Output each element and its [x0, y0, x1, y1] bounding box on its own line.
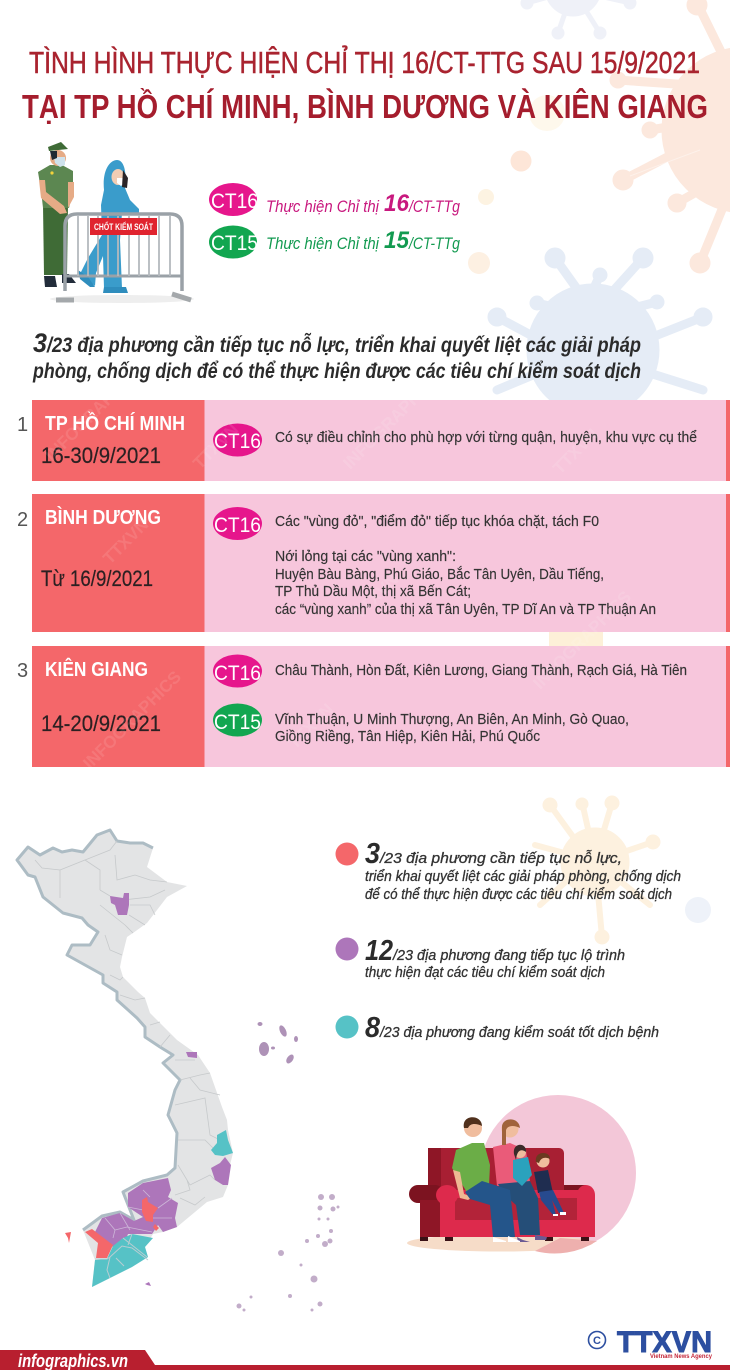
- daughter: [513, 1145, 532, 1186]
- father: [452, 1117, 520, 1242]
- legend: CT16: /CT-TTg: [408, 197, 460, 216]
- logo: TTXVN copyright: Vietnam News Agency: [650, 1353, 712, 1360]
- medic: [78, 160, 139, 293]
- provinces: purple: [95, 893, 231, 1286]
- panel: row 1 TP Ho Chi Minh: 1: [17, 414, 28, 436]
- province lines: [35, 841, 220, 1205]
- background virus decorations: [468, 0, 730, 944]
- legend: CT16: Thực hiện Chỉ thị: [266, 197, 380, 216]
- big orange virus: [610, 0, 730, 273]
- intro text: [32, 328, 641, 383]
- barrier: [56, 214, 191, 300]
- legend: CT16: 16: [384, 190, 410, 217]
- legend item: 3/23: [336, 838, 681, 903]
- legend item: 3/23: /23 địa phương cần tiếp tục nỗ lực,: [379, 850, 622, 867]
- checkpoint sign: [90, 218, 157, 235]
- legend: CT16: [209, 183, 460, 217]
- watermarks on rows: INFOGRAPHICS: [339, 367, 445, 473]
- legend item: 3/23: 3: [365, 838, 380, 870]
- provinces: red: [65, 1197, 159, 1258]
- title: [22, 45, 708, 125]
- legend item: 12/23: [336, 935, 625, 981]
- illustration: soldier and medic at checkpoint barrier: [38, 142, 194, 303]
- son: [534, 1153, 566, 1216]
- panel: row 3 Kien Giang: 3: [17, 660, 28, 682]
- legend: CT15: 15: [384, 227, 410, 254]
- legend item: 12/23: thực hiện đạt các tiêu chí kiểm soát dịch: [365, 965, 605, 981]
- small spots: [510, 150, 532, 172]
- panel: row 1 TP Ho Chi Minh: Có sự điều chỉnh cho phù hợp với từng quận, huyện, khu vực cụ thể: [275, 430, 697, 446]
- legend: CT15: [209, 226, 460, 258]
- panel: row 3 Kien Giang: CT16: [214, 662, 261, 685]
- panel: row 2 Binh Duong: [17, 494, 730, 632]
- panel: row 3 Kien Giang: [17, 646, 730, 767]
- panel: row 2 Binh Duong: Nới lỏng tại các "vùng xanh":: [275, 549, 456, 565]
- watermarks on rows: TTXVN: [99, 515, 152, 568]
- footer bar with website: [0, 1350, 730, 1370]
- sofa: [409, 1148, 595, 1241]
- panel: row 3 Kien Giang: 14-20/9/2021: [41, 711, 161, 736]
- map of Vietnam: [17, 830, 340, 1312]
- watermarks on rows: INFOGRAPHICS: [79, 667, 185, 773]
- panel: row 3 Kien Giang: CT15: [214, 711, 261, 734]
- purple province lines: [105, 1190, 172, 1238]
- panel: row 2 Binh Duong: 2: [17, 509, 28, 531]
- logo: TTXVN copyright: TTXVN: [617, 1326, 712, 1359]
- panel: row 2 Binh Duong: Từ 16/9/2021: [41, 566, 153, 591]
- panel: row 2 Binh Duong: Các "vùng đỏ", "điểm đỏ" tiếp tục khóa chặt, tách F0: [275, 514, 599, 530]
- provinces: teal: [92, 1130, 233, 1287]
- soldier: [38, 142, 76, 287]
- watermarks on rows: INFOGRAPHICS: [529, 587, 635, 693]
- legend item: 8/23: 8: [365, 1012, 381, 1044]
- panel: row 2 Binh Duong: CT16: [214, 514, 261, 537]
- legend: CT15: /CT-TTg: [408, 234, 460, 253]
- islands: Truong Sa: [236, 1194, 340, 1312]
- checkpoint sign: CHỐT KIỂM SOÁT: [94, 221, 153, 233]
- intro text: 3: [33, 328, 47, 358]
- legend item: 8/23: [336, 1012, 659, 1044]
- islands: Hoang Sa: [258, 1022, 298, 1065]
- panel: row 2 Binh Duong: TP Thủ Dầu Một, thị xã Bến Cát;: [275, 584, 471, 600]
- watermarks on rows: TTXVN: [349, 570, 402, 623]
- watermarks on rows: INFOGRAPHICS: [41, 359, 147, 465]
- panel: row 1 TP Ho Chi Minh: CT16: [214, 430, 261, 453]
- legend item: 12/23: 12: [365, 935, 393, 967]
- panel: row 1 TP Ho Chi Minh: TP HỒ CHÍ MINH: [45, 411, 185, 435]
- illustration: family on sofa: [407, 1095, 636, 1254]
- watermarks on rows: TTXVN: [549, 425, 602, 478]
- legend item: 3/23: triển khai quyết liệt các giải pháp phòng, chống dịch: [365, 869, 681, 885]
- logo: TTXVN copyright: C: [593, 1335, 601, 1347]
- panel: row 2 Binh Duong: các “vùng xanh” của thị xã Tân Uyên, TP Dĩ An và TP Thuận An: [275, 602, 656, 618]
- watermarks on rows: TTXVN: [284, 700, 337, 753]
- legend item: 12/23: /23 địa phương đang tiếp tục lộ trình: [392, 948, 625, 964]
- watermarks on rows: [41, 359, 635, 773]
- teal province lines: [95, 1234, 148, 1278]
- intro text: phòng, chống dịch để có thể thực hiện được các tiêu chí kiểm soát dịch: [32, 360, 641, 383]
- legend: CT15: Thực hiện Chỉ thị: [266, 234, 380, 253]
- panel: row 3 Kien Giang: Giồng Riềng, Tân Hiệp, Kiên Hải, Phú Quốc: [275, 729, 540, 745]
- panel: row 1 TP Ho Chi Minh: [17, 400, 730, 481]
- legend item: 8/23: /23 địa phương đang kiểm soát tốt dịch bệnh: [379, 1025, 659, 1041]
- mother: [493, 1119, 547, 1242]
- top pale virus: [521, 0, 636, 39]
- legend: CT16: CT16: [211, 190, 258, 213]
- panel: row 2 Binh Duong: BÌNH DƯƠNG: [45, 506, 161, 529]
- map border: [17, 830, 180, 1230]
- panel: row 3 Kien Giang: Châu Thành, Hòn Đất, Kiên Lương, Giang Thành, Rạch Giá, Hà Tiên: [275, 663, 687, 679]
- watermarks on rows: TTXVN: [189, 420, 242, 473]
- panel: row 3 Kien Giang: Vĩnh Thuận, U Minh Thượng, An Biên, An Minh, Gò Quao,: [275, 712, 629, 728]
- panel: row 1 TP Ho Chi Minh: 16-30/9/2021: [41, 443, 161, 468]
- yellow virus: [535, 796, 660, 944]
- legend item: 3/23: để có thể thực hiện được các tiêu chí kiểm soát dịch: [365, 887, 672, 903]
- intro text: /23 địa phương cần tiếp tục nỗ lực, triển khai quyết liệt các giải pháp: [46, 334, 641, 357]
- legend: CT15: CT15: [211, 232, 258, 255]
- panel: row 2 Binh Duong: Huyện Bàu Bàng, Phú Giáo, Bắc Tân Uyên, Dầu Tiếng,: [275, 566, 604, 583]
- panel: row 3 Kien Giang: KIÊN GIANG: [45, 657, 148, 681]
- map land: [17, 830, 233, 1287]
- big blue virus: [488, 248, 712, 416]
